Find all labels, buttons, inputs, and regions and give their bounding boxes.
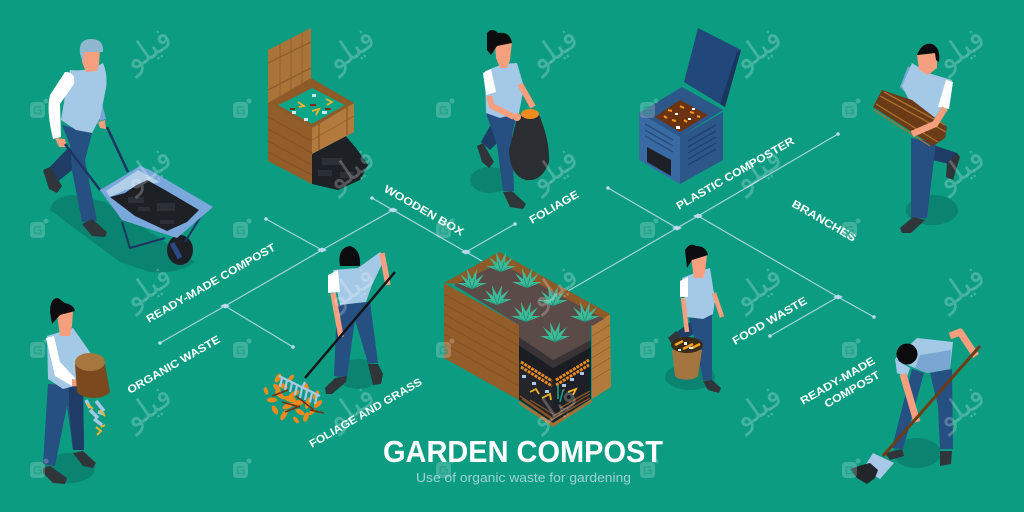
section right (553, 360, 591, 423)
shoes (43, 451, 96, 484)
white sleeve (328, 270, 340, 293)
legs (43, 384, 84, 466)
front leg (911, 138, 936, 218)
hair with ponytail (487, 30, 512, 55)
watermark pattern: فيلو (725, 258, 789, 318)
neck and face (495, 42, 512, 68)
watermark pattern: فيلو (725, 140, 789, 200)
torso (682, 268, 715, 319)
bucket (672, 350, 702, 380)
back shoe (477, 143, 494, 168)
connector lines: right network (568, 132, 876, 338)
front corner edge (519, 399, 592, 427)
watermark pattern: فيلو (318, 258, 382, 318)
watermark pattern: فيلو (115, 258, 179, 318)
torso (485, 63, 524, 118)
arms (903, 332, 976, 422)
arms (333, 253, 388, 337)
box interior rim (268, 78, 354, 128)
compost contents (655, 100, 708, 132)
compost on shovel (850, 463, 878, 484)
title: GARDEN COMPOST (383, 434, 663, 469)
wooden box composter (268, 28, 368, 190)
left wall (444, 283, 519, 400)
right face (680, 112, 723, 184)
watermark pattern: فيلو (521, 258, 585, 318)
hand (513, 113, 521, 121)
watermark pattern: فيلو (521, 20, 585, 80)
back leg (932, 145, 957, 165)
man with shovel (850, 332, 980, 484)
torso (61, 63, 107, 133)
front shoe (703, 380, 721, 393)
front leg (62, 125, 97, 222)
subtitle: Use of organic waste for gardening (416, 470, 631, 485)
upturned bucket (75, 364, 110, 398)
hair (896, 344, 918, 364)
watermark pattern: فيلو (115, 140, 179, 200)
ground shadow (906, 195, 958, 225)
central raised compost bed (444, 252, 611, 427)
box right face (312, 103, 354, 154)
shovel handle (883, 346, 980, 456)
front shoe (900, 217, 925, 233)
ground shadow (45, 453, 95, 483)
frame (122, 216, 201, 248)
back shoe (946, 153, 960, 180)
shovel blade (863, 453, 894, 479)
watermark pattern: فيلو (725, 378, 789, 438)
dark layer (519, 345, 591, 381)
left face (639, 113, 680, 184)
torso (333, 252, 385, 305)
watermark pattern: فيلو (928, 20, 992, 80)
soil surface (454, 263, 604, 360)
foliage in bag (521, 109, 539, 119)
section left (519, 359, 553, 423)
twig layer (520, 391, 590, 420)
green waste contents (278, 88, 345, 124)
watermark pattern: فيلو (521, 378, 585, 438)
woman with foliage bag (470, 30, 549, 209)
hair (339, 246, 360, 266)
ground shadow (336, 359, 380, 389)
ground shadow (470, 167, 510, 193)
watermark pattern: فيلو (928, 258, 992, 318)
shoes (885, 449, 952, 466)
composter interior (639, 87, 723, 137)
watermark pattern: فيلو (928, 140, 992, 200)
neck and face (81, 50, 100, 72)
ground shadow (665, 364, 715, 390)
falling waste (86, 400, 104, 425)
watermark pattern: فيلو (521, 140, 585, 200)
label: foliage and grass: FOLIAGE AND GRASS (308, 376, 424, 451)
hand (72, 379, 86, 387)
face (917, 53, 937, 75)
sleeve (895, 359, 910, 377)
label: food waste: FOOD WASTE (730, 295, 809, 348)
far sleeve (96, 95, 106, 121)
arms (683, 293, 722, 332)
branches bundle (873, 90, 947, 146)
man with wheelbarrow (43, 39, 213, 265)
woman pouring bucket (43, 298, 110, 484)
tray back highlight (106, 170, 160, 197)
man with rake (263, 246, 395, 424)
hair with ponytail (50, 298, 75, 324)
label: ready-made compost (two lines): READY-MADE (798, 355, 877, 408)
label: branches: BRANCHES (790, 198, 858, 245)
legs (892, 369, 953, 449)
soil edge (519, 337, 591, 368)
rake head (279, 376, 320, 404)
back leg (677, 322, 697, 340)
label: organic waste: ORGANIC WASTE (126, 334, 222, 397)
open lid (268, 28, 311, 103)
right wall (592, 314, 611, 399)
torso (47, 328, 92, 389)
back shoe (43, 167, 62, 193)
lid edge (720, 50, 741, 107)
torso shade (915, 350, 951, 373)
ground shadow (893, 438, 941, 468)
arm (912, 108, 945, 134)
watermark pattern: فيلو (318, 140, 382, 200)
foliage pile (263, 372, 323, 424)
white sleeve (680, 277, 688, 297)
top rim (444, 252, 610, 326)
plastic composter (639, 28, 741, 184)
compost highlights (318, 158, 354, 178)
back leg (47, 148, 82, 183)
man carrying branches (873, 44, 960, 233)
watermark pattern: فيلو (725, 20, 789, 80)
woman with food waste bucket (665, 245, 722, 393)
neck and face (57, 311, 73, 336)
wheel (167, 235, 193, 265)
label: foliage: FOLIAGE (528, 189, 581, 227)
white sleeve (49, 72, 74, 139)
hair (917, 44, 939, 62)
white sleeve (483, 69, 496, 95)
back shoe (668, 331, 682, 344)
white sleeve (938, 80, 953, 109)
hair (80, 39, 103, 62)
shoes (325, 364, 383, 394)
watermark pattern: فيلو (115, 20, 179, 80)
lid (684, 28, 741, 107)
front shoe (503, 191, 526, 209)
legs (334, 302, 378, 377)
connector lines: left network (158, 196, 517, 349)
bucket waste (671, 337, 703, 353)
orange layer (521, 360, 589, 386)
white sleeve (46, 336, 75, 386)
label: wooden box: WOODEN BOX (382, 183, 466, 239)
front leg (689, 315, 712, 380)
label: plastic composter: PLASTIC COMPOSTER (674, 135, 797, 213)
black compost pile (312, 134, 368, 190)
handles (65, 127, 128, 190)
black bag (509, 112, 549, 180)
box left face (268, 103, 312, 184)
wheelbarrow shadow and man ground shadow (50, 195, 195, 272)
torso (895, 338, 953, 373)
hair with ponytail (685, 245, 708, 268)
back leg (481, 126, 505, 150)
black door (647, 147, 671, 176)
arms (489, 84, 533, 117)
rake handle (305, 272, 395, 378)
label: ready-made compost (two lines): COMPOST (822, 369, 882, 411)
food waste layer (522, 372, 584, 393)
compost load (110, 180, 199, 231)
label: ready-made compost: READY-MADE COMPOST (144, 242, 278, 326)
tray (100, 166, 213, 238)
torso (902, 63, 952, 122)
watermark pattern: فيلو (115, 378, 179, 438)
neck and face (691, 255, 707, 278)
front shoe (82, 219, 107, 237)
watermark pattern: فيلو (928, 378, 992, 438)
compost highlights (128, 197, 175, 224)
hands (55, 120, 106, 147)
watermark pattern: فيلو (318, 20, 382, 80)
plants (457, 252, 600, 342)
watermark pattern: فيلو (318, 378, 382, 438)
far sleeve (900, 66, 914, 95)
front leg (486, 113, 517, 191)
